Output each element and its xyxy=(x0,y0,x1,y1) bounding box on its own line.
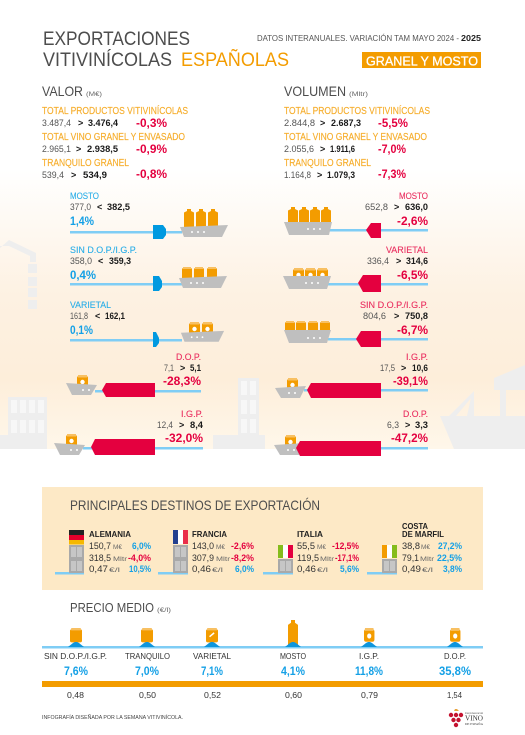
destino: francia: 307,9 xyxy=(192,553,214,563)
destino: italia: 0,46 xyxy=(297,564,316,574)
valor row: igp xyxy=(54,409,203,455)
panel: principales destinos xyxy=(42,487,483,590)
destino: francia: 0,46 xyxy=(192,564,211,574)
destino: italia: 5,6% xyxy=(340,564,359,574)
volumen row: mosto: MOSTO xyxy=(399,191,428,202)
precio: tranquilo xyxy=(125,628,170,700)
precio: dop: 1,54 xyxy=(447,690,462,700)
destino: francia: FRANCIA xyxy=(192,529,227,539)
valor row: sin dop igp: SIN D.O.P./I.G.P. xyxy=(70,245,137,256)
volumen row: dop xyxy=(274,409,428,456)
panel: valor totals: 2.938,5 xyxy=(87,144,118,154)
footer credit: INFOGRAFÍA DISEÑADA POR LA SEMANA VITIVINÍCOLA. xyxy=(42,714,183,721)
destino: italia: -17,1% xyxy=(335,553,359,563)
volumen row: mosto: 636,0 xyxy=(405,202,428,212)
destino: alemania: 318,5 xyxy=(89,553,111,563)
destino: alemania: 6,0% xyxy=(132,541,151,551)
panel: valor totals: -0,3% xyxy=(136,116,167,130)
destino: alemania: Mltr xyxy=(113,557,127,563)
valor row: varietal: 162,1 xyxy=(105,311,125,321)
valor row: sin dop igp: 359,3 xyxy=(109,256,131,266)
panel: volumen totals: 2.844,8 xyxy=(284,118,315,128)
panel: valor totals: TOTAL VINO GRANEL Y ENVASADO xyxy=(42,132,185,143)
volumen row: mosto xyxy=(284,191,428,238)
volumen row: sin dop igp: 750,8 xyxy=(405,311,428,321)
precio: igp: I.G.P. xyxy=(359,651,379,661)
panel: volumen totals: > xyxy=(320,118,325,128)
destino: italia xyxy=(263,529,359,574)
panel: valor totals: 539,4 xyxy=(42,170,64,180)
destino: italia: 55,5 xyxy=(297,541,315,551)
heading: destinos: PRINCIPALES DESTINOS DE EXPORTACIÓN xyxy=(70,497,320,513)
precio: dop: 35,8% xyxy=(439,664,471,678)
valor row: mosto: < xyxy=(97,202,102,212)
panel: volumen totals: 1.911,6 xyxy=(330,144,355,154)
panel: volumen totals: > xyxy=(317,170,322,180)
valor row: sin dop igp: < xyxy=(98,256,103,266)
valor row: igp: -32,0% xyxy=(165,431,203,445)
destino: alemania: 150,7 xyxy=(89,541,111,551)
volumen row: igp: -39,1% xyxy=(393,374,428,388)
volumen row: varietal: > xyxy=(396,256,401,266)
panel: volumen totals: VOLUMEN xyxy=(284,83,346,99)
panel: valor totals xyxy=(42,83,188,181)
volumen row: varietal: 336,4 xyxy=(367,256,389,266)
destino: costa de marfil: COSTA xyxy=(402,521,428,531)
precio: varietal: 7,1% xyxy=(201,664,223,678)
valor row: dop xyxy=(66,352,201,397)
panel: valor totals: > xyxy=(71,170,76,180)
badge: granel y mosto: GRANEL Y MOSTO xyxy=(366,54,478,68)
valor row: igp: 12,4 xyxy=(157,420,173,430)
panel: volumen totals: TOTAL PRODUCTOS VITIVINÍCOLAS xyxy=(284,106,430,117)
panel: volumen totals: TOTAL VINO GRANEL Y ENVASADO xyxy=(284,132,427,143)
precio: igp: 0,79 xyxy=(361,690,378,700)
volumen row: varietal: VARIETAL xyxy=(386,245,428,256)
valor row: varietal xyxy=(70,300,224,347)
volumen row: igp: I.G.P. xyxy=(406,352,428,363)
heading: precio medio: PRECIO MEDIO xyxy=(70,600,154,615)
valor row: sin dop igp xyxy=(70,245,227,291)
volumen row: igp: > xyxy=(401,363,406,373)
volumen row: mosto: > xyxy=(394,202,399,212)
destino: italia: 119,5 xyxy=(297,553,319,563)
subtitle: data period: 2025 xyxy=(461,33,481,43)
destino: alemania: 0,47 xyxy=(89,564,108,574)
valor row: mosto: 1,4% xyxy=(70,214,94,228)
volumen row: mosto: -2,6% xyxy=(397,214,428,228)
destino: costa de marfil: Mltr xyxy=(420,557,434,563)
panel: volumen totals: 2.687,3 xyxy=(331,118,361,128)
panel: valor totals: 3.487,4 xyxy=(42,118,71,128)
volumen row: sin dop igp: SIN D.O.P./I.G.P. xyxy=(360,300,428,311)
destino: costa de marfil: 3,8% xyxy=(443,564,462,574)
valor row: dop: 7,1 xyxy=(164,363,174,373)
precio: mosto: 4,1% xyxy=(281,664,305,678)
volumen row: dop: 3,3 xyxy=(415,420,428,430)
panel: volumen totals: TRANQUILO GRANEL xyxy=(284,158,371,169)
panel: valor totals: -0,8% xyxy=(136,167,167,181)
logo: vino de españa: VINO xyxy=(465,714,483,722)
precio: sin dop igp xyxy=(44,628,107,700)
valor row: dop: 5,1 xyxy=(190,363,201,373)
precio: dop: D.O.P. xyxy=(444,651,466,661)
destino: alemania xyxy=(55,529,151,574)
destino: costa de marfil: €/l xyxy=(422,568,433,574)
precio: tranquilo: TRANQUILO xyxy=(125,651,170,661)
destino: alemania: ALEMANIA xyxy=(89,529,131,539)
destino: alemania: M€ xyxy=(113,545,123,551)
title: VITIVINÍCOLAS xyxy=(43,50,172,71)
destino: italia: -12,5% xyxy=(332,541,359,551)
panel: volumen totals: 1.164,8 xyxy=(284,170,311,180)
volumen row: dop: -47,2% xyxy=(391,431,428,445)
volumen row: sin dop igp: -6,7% xyxy=(397,323,428,337)
destino: francia: 6,0% xyxy=(235,564,254,574)
panel: volumen totals: -7,3% xyxy=(378,167,406,181)
valor row: mosto: 377,0 xyxy=(70,202,91,212)
destino: francia: M€ xyxy=(216,545,226,551)
valor row: mosto: MOSTO xyxy=(70,191,99,202)
destino: costa de marfil: 79,1 xyxy=(402,553,419,563)
valor row: varietal: VARIETAL xyxy=(70,300,111,311)
destino: francia: -2,6% xyxy=(231,541,254,551)
precio: sin dop igp: 0,48 xyxy=(67,690,84,700)
destino: costa de marfil: 22,5% xyxy=(437,553,462,563)
panel: valor totals: 534,9 xyxy=(83,170,107,180)
valor row: sin dop igp: 0,4% xyxy=(70,268,96,282)
logo: vino de españa: Interprofesional del xyxy=(465,711,483,715)
volumen row: varietal: 314,6 xyxy=(406,256,428,266)
destino: francia: €/l xyxy=(212,568,223,574)
valor row: varietal: 161,8 xyxy=(70,311,88,321)
destino: italia: M€ xyxy=(317,545,327,551)
subtitle: data period: DATOS INTERANUALES. VARIACIÓN TAM MAYO 2024 - xyxy=(257,33,459,43)
precio: tranquilo: 0,50 xyxy=(139,690,156,700)
precio: varietal: VARIETAL xyxy=(193,651,231,661)
volumen row: dop: > xyxy=(405,420,410,430)
destino: italia: Mltr xyxy=(320,557,334,563)
panel: volumen totals: (Mltr) xyxy=(349,92,368,98)
background port scene xyxy=(0,170,525,449)
destino: costa de marfil: 38,8 xyxy=(402,541,420,551)
valor row: varietal: < xyxy=(95,311,100,321)
destino: costa de marfil: M€ xyxy=(421,545,431,551)
volumen row: sin dop igp: > xyxy=(394,311,399,321)
destino: francia: 143,0 xyxy=(192,541,214,551)
valor row: igp: I.G.P. xyxy=(181,409,203,420)
heading: precio medio: (€/l) xyxy=(157,608,171,614)
volumen row: dop: 6,3 xyxy=(387,420,399,430)
panel: volumen totals: 1.079,3 xyxy=(327,170,355,180)
volumen row: mosto: 652,8 xyxy=(365,202,388,212)
destino: costa de marfil: 27,2% xyxy=(438,541,462,551)
valor row: igp: 8,4 xyxy=(190,420,203,430)
valor row: varietal: 0,1% xyxy=(70,323,93,337)
valor row: mosto: 382,5 xyxy=(107,202,130,212)
valor row: sin dop igp: 358,0 xyxy=(70,256,92,266)
panel: valor totals: VALOR xyxy=(42,83,83,99)
chart: precio medio xyxy=(42,620,483,700)
panel: valor totals: TOTAL PRODUCTOS VITIVINÍCOLAS xyxy=(42,106,188,117)
title: EXPORTACIONES xyxy=(43,29,190,50)
volumen row: dop: D.O.P. xyxy=(403,409,428,420)
precio: varietal xyxy=(193,628,231,700)
volumen row: igp: 17,5 xyxy=(380,363,395,373)
destino: francia xyxy=(158,529,254,574)
precio: mosto: 0,60 xyxy=(285,690,302,700)
panel: valor totals: -0,9% xyxy=(136,142,167,156)
title xyxy=(43,29,289,71)
destino: costa de marfil xyxy=(367,521,462,574)
destino: costa de marfil: 0,49 xyxy=(402,564,421,574)
panel: valor totals: TRANQUILO GRANEL xyxy=(42,158,129,169)
destino: italia: ITALIA xyxy=(297,529,323,539)
valor row: dop: > xyxy=(180,363,185,373)
panel: valor totals: 3.476,4 xyxy=(88,118,118,128)
valor row: mosto xyxy=(70,191,228,239)
title: ESPAÑOLAS xyxy=(181,49,289,71)
panel: valor totals: > xyxy=(78,118,83,128)
destino: francia: -8,2% xyxy=(231,553,254,563)
panel: volumen totals xyxy=(284,83,430,181)
destino: italia: €/l xyxy=(317,568,328,574)
valor row: igp: > xyxy=(179,420,184,430)
precio: mosto xyxy=(280,620,306,700)
panel: valor totals: > xyxy=(76,144,81,154)
volumen row: varietal xyxy=(283,245,428,292)
logo: vino de españa: DE ESPAÑA xyxy=(465,721,484,726)
precio: dop xyxy=(439,628,471,700)
valor row: dop: D.O.P. xyxy=(176,352,201,363)
precio: tranquilo: 7,0% xyxy=(135,664,159,678)
panel: valor totals: 2.965,1 xyxy=(42,144,71,154)
volumen row: igp: 10,6 xyxy=(412,363,428,373)
precio: igp: 11,8% xyxy=(355,664,383,678)
volumen row: varietal: -6,5% xyxy=(397,268,428,282)
precio: sin dop igp: 7,6% xyxy=(64,664,88,678)
panel: volumen totals: > xyxy=(320,144,325,154)
destino: costa de marfil: DE MARFIL xyxy=(402,529,444,539)
precio: mosto: MOSTO xyxy=(280,651,306,661)
destino: alemania: €/l xyxy=(109,568,120,574)
destino: francia: Mltr xyxy=(216,557,230,563)
destino: alemania: 10,5% xyxy=(129,564,151,574)
volumen row: igp xyxy=(275,352,428,398)
panel: volumen totals: 2.055,6 xyxy=(284,144,314,154)
volumen row: sin dop igp: 804,6 xyxy=(363,311,386,321)
destino: alemania: -4,0% xyxy=(128,553,151,563)
panel: volumen totals: -7,0% xyxy=(378,142,406,156)
logo: vino de españa xyxy=(449,709,484,727)
precio: sin dop igp: SIN D.O.P./I.G.P. xyxy=(44,651,107,661)
precio: igp xyxy=(355,628,383,700)
volumen row: sin dop igp xyxy=(284,300,428,347)
valor row: dop: -28,3% xyxy=(163,374,201,388)
panel: valor totals: (M€) xyxy=(86,92,102,98)
panel: volumen totals: -5,5% xyxy=(378,116,408,130)
precio: varietal: 0,52 xyxy=(204,690,221,700)
